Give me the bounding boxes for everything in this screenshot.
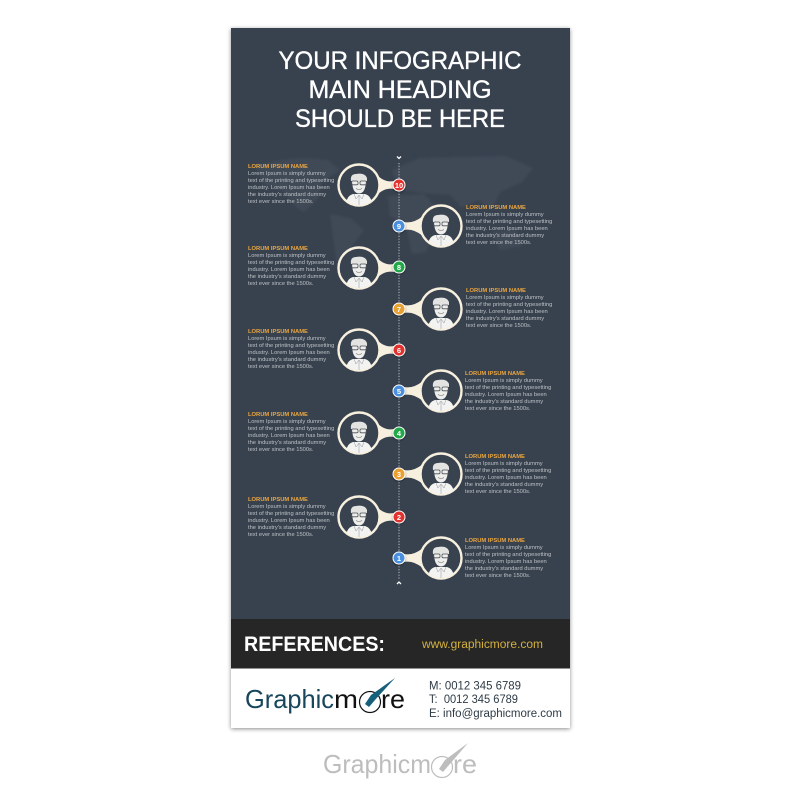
item 2: the industry's standard dummy xyxy=(248,525,326,531)
item 5: the industry's standard dummy xyxy=(465,399,543,405)
item 6: 6 xyxy=(397,346,401,355)
world map xyxy=(255,156,533,270)
item 6: text of the printing and typesetting xyxy=(248,343,334,349)
references band: REFERENCES: xyxy=(244,633,385,656)
item 9 xyxy=(393,205,552,247)
item 5: text ever since the 1500s. xyxy=(465,406,531,412)
item 5: industry. Lorem Ipsum has been xyxy=(465,392,547,398)
item 8: the industry's standard dummy xyxy=(248,274,326,280)
item 3 xyxy=(393,454,551,495)
contact details: T: 0012 345 6789 xyxy=(429,694,518,706)
item 3: industry. Lorem Ipsum has been xyxy=(465,475,547,481)
item 7 xyxy=(393,288,552,330)
item 10: LORUM IPSUM NAME xyxy=(248,164,308,170)
timeline line with arrows xyxy=(397,156,401,584)
item 1: Lorem Ipsum is simply dummy xyxy=(465,545,543,551)
item 9: text of the printing and typesetting xyxy=(466,219,552,225)
bottom watermark logo xyxy=(323,743,477,779)
item 3: Lorem Ipsum is simply dummy xyxy=(465,461,543,467)
item 2: Lorem Ipsum is simply dummy xyxy=(248,504,326,510)
item 6: industry. Lorem Ipsum has been xyxy=(248,350,330,356)
item 2 xyxy=(248,496,405,538)
footer logo: m xyxy=(334,684,358,714)
item 3: 3 xyxy=(397,470,401,479)
item 4: text ever since the 1500s. xyxy=(248,447,314,453)
item 4 xyxy=(248,412,405,454)
footer logo: re xyxy=(381,684,405,714)
contact details: E: info@graphicmore.com xyxy=(429,708,562,720)
item 1: LORUM IPSUM NAME xyxy=(465,538,525,544)
item 5: 5 xyxy=(397,387,401,396)
bottom watermark logo: Graphicm xyxy=(323,749,431,779)
item 7: industry. Lorem Ipsum has been xyxy=(466,309,548,315)
item 5: Lorem Ipsum is simply dummy xyxy=(465,378,543,384)
item 9: 9 xyxy=(397,222,401,231)
item 4: 4 xyxy=(397,429,402,438)
item 4: industry. Lorem Ipsum has been xyxy=(248,433,330,439)
footer logo xyxy=(245,678,405,714)
title: SHOULD BE HERE xyxy=(295,105,505,133)
footer logo: Graphic xyxy=(245,684,334,714)
title: YOUR INFOGRAPHIC xyxy=(278,47,522,75)
item 8: text ever since the 1500s. xyxy=(248,281,314,287)
item 7: Lorem Ipsum is simply dummy xyxy=(466,295,544,301)
contact details xyxy=(429,680,562,720)
item 4: Lorem Ipsum is simply dummy xyxy=(248,419,326,425)
item 10: industry. Lorem Ipsum has been xyxy=(248,185,330,191)
item 6: the industry's standard dummy xyxy=(248,357,326,363)
item 9: LORUM IPSUM NAME xyxy=(466,205,526,211)
item 1 xyxy=(393,538,551,579)
item 2: text of the printing and typesetting xyxy=(248,511,334,517)
item 8 xyxy=(248,246,405,289)
item 2: text ever since the 1500s. xyxy=(248,532,314,538)
title xyxy=(278,47,522,133)
item 2: 2 xyxy=(397,513,401,522)
item 2: industry. Lorem Ipsum has been xyxy=(248,518,330,524)
references band: www.graphicmore.com xyxy=(421,639,543,651)
white footer panel xyxy=(231,668,570,728)
item 3: the industry's standard dummy xyxy=(465,482,543,488)
item 2: LORUM IPSUM NAME xyxy=(248,497,308,503)
title: MAIN HEADING xyxy=(308,76,492,104)
item 4: LORUM IPSUM NAME xyxy=(248,412,308,418)
item 8: text of the printing and typesetting xyxy=(248,260,334,266)
item 9: industry. Lorem Ipsum has been xyxy=(466,226,548,232)
item 9: text ever since the 1500s. xyxy=(466,240,532,246)
item 7: LORUM IPSUM NAME xyxy=(466,288,526,294)
item 9: Lorem Ipsum is simply dummy xyxy=(466,212,544,218)
item 8: LORUM IPSUM NAME xyxy=(248,246,308,252)
item 5: LORUM IPSUM NAME xyxy=(465,371,525,377)
item 1: industry. Lorem Ipsum has been xyxy=(465,559,547,565)
item 10: Lorem Ipsum is simply dummy xyxy=(248,171,326,177)
item 8: industry. Lorem Ipsum has been xyxy=(248,267,330,273)
item 4: text of the printing and typesetting xyxy=(248,426,334,432)
item 8: 8 xyxy=(397,263,401,272)
references band xyxy=(231,619,570,668)
item 1: text of the printing and typesetting xyxy=(465,552,551,558)
item 7: text ever since the 1500s. xyxy=(466,323,532,329)
item 6: LORUM IPSUM NAME xyxy=(248,329,308,335)
bottom watermark logo: re xyxy=(453,749,477,779)
item 9: the industry's standard dummy xyxy=(466,233,544,239)
item 3: text ever since the 1500s. xyxy=(465,489,531,495)
item 1: text ever since the 1500s. xyxy=(465,573,531,579)
item 6: text ever since the 1500s. xyxy=(248,364,314,370)
item 7: the industry's standard dummy xyxy=(466,316,544,322)
item 3: text of the printing and typesetting xyxy=(465,468,551,474)
item 3: LORUM IPSUM NAME xyxy=(465,454,525,460)
item 5: text of the printing and typesetting xyxy=(465,385,551,391)
item 10: the industry's standard dummy xyxy=(248,192,326,198)
item 7: text of the printing and typesetting xyxy=(466,302,552,308)
contact details: M: 0012 345 6789 xyxy=(429,680,521,692)
item 1: the industry's standard dummy xyxy=(465,566,543,572)
item 1: 1 xyxy=(397,554,401,563)
item 5 xyxy=(393,370,551,412)
item 8: Lorem Ipsum is simply dummy xyxy=(248,253,326,259)
item 6 xyxy=(248,329,405,371)
item 6: Lorem Ipsum is simply dummy xyxy=(248,336,326,342)
item 10: text ever since the 1500s. xyxy=(248,199,314,205)
item 10: 10 xyxy=(395,181,403,190)
item 10: text of the printing and typesetting xyxy=(248,178,334,184)
item 4: the industry's standard dummy xyxy=(248,440,326,446)
panel: dark infographic background xyxy=(231,28,570,728)
item 10 xyxy=(248,164,405,206)
item 7: 7 xyxy=(397,305,401,314)
